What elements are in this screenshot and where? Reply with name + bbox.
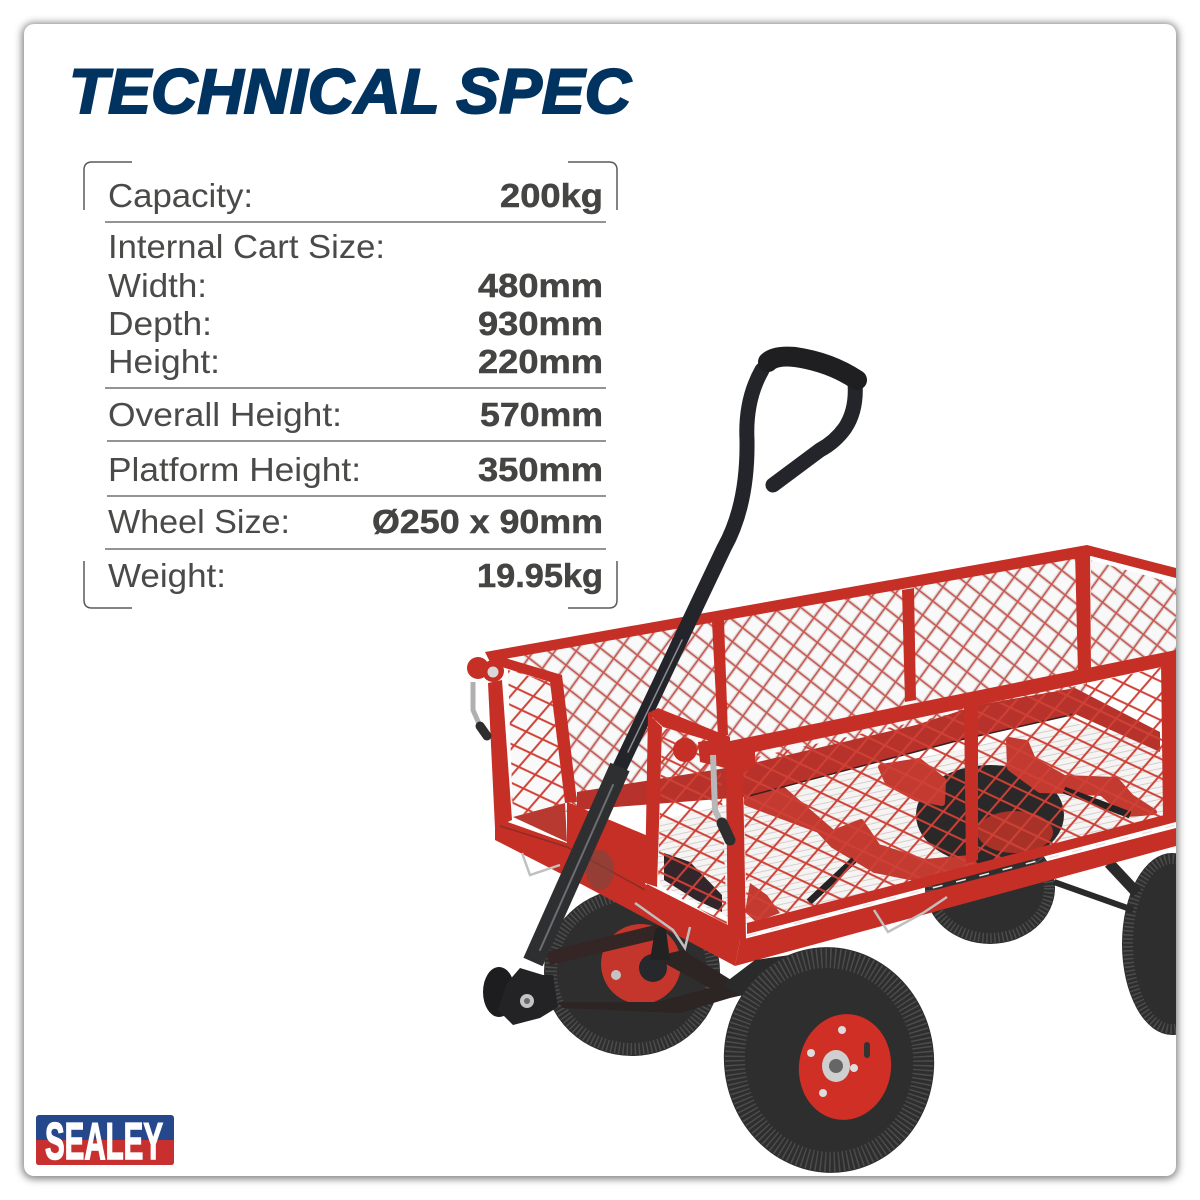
wheel support bracket (730, 955, 788, 996)
row: internal cart size heading: Internal Cart Size: (108, 228, 385, 265)
base clips (522, 853, 947, 948)
far end mesh panel (1091, 560, 1176, 669)
handle (533, 357, 857, 962)
far middle wheel (925, 856, 1055, 944)
rear axle struts (1054, 882, 1133, 910)
front end mesh panel (658, 727, 727, 925)
row: platform height: Platform Height: (108, 451, 361, 488)
left base band (495, 802, 740, 966)
logo: Sealey (36, 1113, 174, 1171)
row dividers (105, 222, 606, 549)
tow bar lower arm (558, 950, 752, 1013)
floor struts (809, 790, 1130, 902)
end panel frame (485, 652, 577, 828)
back frame rails and posts (485, 545, 1176, 737)
row: weight: 19.95kg (477, 557, 603, 594)
row: width: 480mm (478, 267, 603, 304)
row: wheel size: Wheel Size: (108, 503, 290, 540)
rear left wheel (544, 888, 720, 1056)
row: overall height (108, 396, 603, 433)
logo: Sealey: SEALEY (45, 1113, 163, 1171)
row: width: Width: (108, 267, 207, 304)
back mesh panel (510, 555, 1087, 818)
row: capacity: 200kg (500, 177, 603, 214)
back lower rail (577, 688, 1160, 810)
left end panel (467, 652, 577, 842)
row: depth (108, 305, 603, 342)
wheel seen through the floor (916, 765, 1064, 865)
row: platform height: 350mm (478, 451, 603, 488)
row: depth: Depth: (108, 305, 212, 342)
row: weight: Weight: (108, 557, 226, 594)
row: weight (108, 557, 603, 594)
row: depth: 930mm (478, 305, 603, 342)
row: wheel size (108, 503, 603, 540)
specification table (84, 162, 617, 608)
floor supports (747, 740, 1154, 880)
row: overall height: 570mm (480, 396, 603, 433)
row: width (108, 267, 603, 304)
row: platform height (108, 451, 603, 488)
product illustration: red mesh garden cart (467, 357, 1200, 1187)
front base band (735, 828, 1176, 966)
hinge and front latch (673, 738, 730, 840)
row: capacity (108, 177, 603, 214)
tow bar upper arm (545, 923, 667, 965)
hitch bracket (483, 967, 558, 1025)
front panel frame (645, 650, 1176, 940)
end latch (473, 682, 487, 736)
row: height: 220mm (478, 343, 603, 380)
table frame brackets (84, 162, 617, 608)
bracket under wheel (650, 926, 670, 960)
row: height: Height: (108, 343, 220, 380)
row: capacity: Capacity: (108, 177, 253, 214)
row: height (108, 343, 603, 380)
far right wheel (1122, 853, 1176, 1035)
title: TECHNICAL SPEC (69, 57, 633, 127)
hinge (467, 657, 504, 682)
front wheel (724, 947, 934, 1173)
row: wheel size: Ø250 x 90mm (372, 503, 603, 540)
front side mesh panel (743, 664, 1176, 923)
row: overall height: Overall Height: (108, 396, 342, 433)
cart floor (655, 722, 1176, 925)
